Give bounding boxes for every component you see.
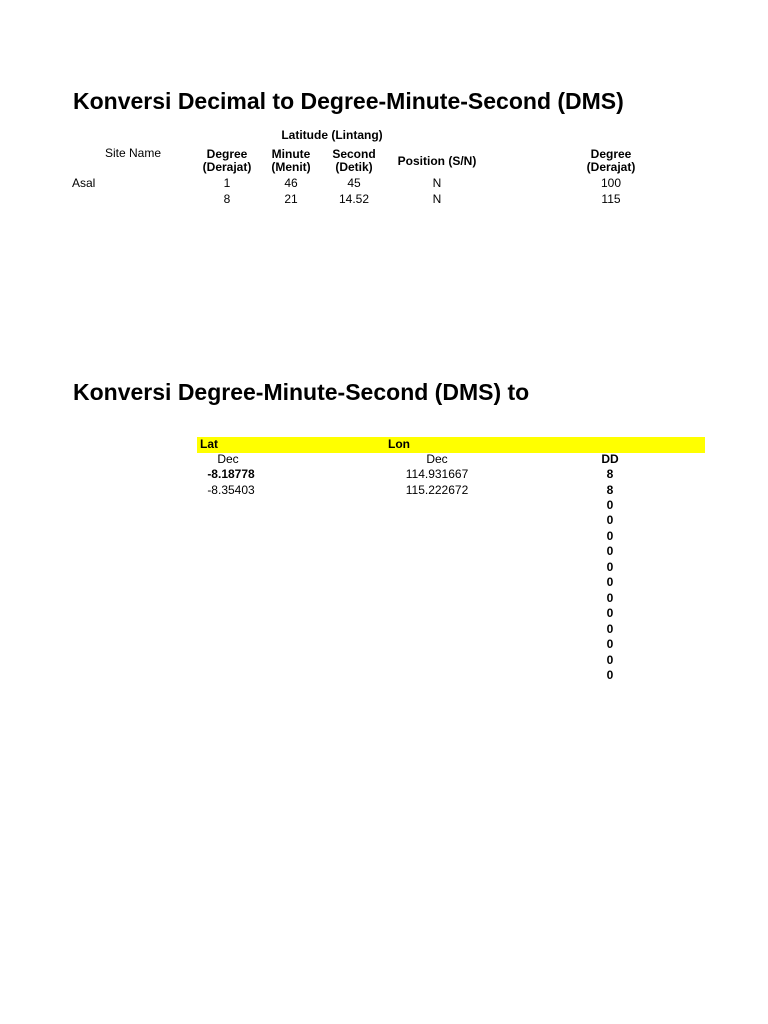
- table: DMS to decimal: 8: [607, 467, 613, 481]
- table: decimal to DMS: N: [433, 192, 441, 206]
- table: DMS to decimal: 0: [607, 622, 613, 636]
- table: decimal to DMS: 46: [284, 176, 298, 190]
- table: decimal to DMS: 14.52: [339, 192, 369, 206]
- table: DMS to decimal: -8.35403: [207, 483, 255, 497]
- table: DMS to decimal: 0: [607, 544, 613, 558]
- table: decimal to DMS: Second: [332, 147, 376, 161]
- table: DMS to decimal: 0: [607, 606, 613, 620]
- table: decimal to DMS: 45: [347, 176, 361, 190]
- table: decimal to DMS: Site Name: [105, 146, 161, 160]
- table: DMS to decimal: [197, 437, 705, 682]
- table: DMS to decimal: Dec: [217, 452, 239, 466]
- table: DMS to decimal: Dec: [426, 452, 448, 466]
- table: DMS to decimal: 115.222672: [406, 483, 468, 497]
- table: DMS to decimal: 0: [607, 653, 613, 667]
- table: DMS to decimal: 0: [607, 637, 613, 651]
- table: decimal to DMS: 21: [284, 192, 298, 206]
- table: decimal to DMS: Degree: [591, 147, 631, 161]
- table: DMS to decimal: 0: [607, 591, 613, 605]
- table: decimal to DMS: 100: [601, 176, 621, 190]
- table: DMS to decimal: 0: [607, 513, 613, 527]
- table: DMS to decimal: 0: [607, 529, 613, 543]
- yellow header bar: [197, 437, 705, 453]
- table: DMS to decimal: 0: [607, 498, 613, 512]
- table: decimal to DMS: 8: [224, 192, 230, 206]
- table: DMS to decimal: 114.931667: [406, 467, 468, 481]
- table: decimal to DMS: N: [433, 176, 441, 190]
- table: decimal to DMS: Degree: [207, 147, 247, 161]
- table: decimal to DMS: (Menit): [271, 160, 311, 174]
- table: decimal to DMS: Position (S/N): [398, 154, 476, 168]
- table: decimal to DMS: 115: [601, 192, 621, 206]
- table: DMS to decimal: -8.18778: [207, 467, 255, 481]
- table: decimal to DMS: (Derajat): [587, 160, 635, 174]
- latitude header: Latitude (Lintang): [281, 128, 383, 142]
- table: DMS to decimal: 0: [607, 668, 613, 682]
- table: DMS to decimal: Lat: [200, 437, 218, 451]
- table: decimal to DMS: [72, 128, 635, 206]
- table: decimal to DMS: Asal: [72, 176, 95, 190]
- title: DMS to decimal: Konversi Degree-Minute-Second (DMS) to: [73, 379, 529, 405]
- title: decimal to DMS: Konversi Decimal to Degree-Minute-Second (DMS): [73, 88, 624, 114]
- table: decimal to DMS: (Detik): [335, 160, 373, 174]
- table: DMS to decimal: 8: [607, 483, 613, 497]
- table: DMS to decimal: 0: [607, 560, 613, 574]
- table: DMS to decimal: 0: [607, 575, 613, 589]
- table: decimal to DMS: Minute: [272, 147, 310, 161]
- table: decimal to DMS: 1: [224, 176, 230, 190]
- table: DMS to decimal: Lon: [388, 437, 410, 451]
- table: DMS to decimal: DD: [601, 452, 619, 466]
- table: decimal to DMS: (Derajat): [203, 160, 251, 174]
